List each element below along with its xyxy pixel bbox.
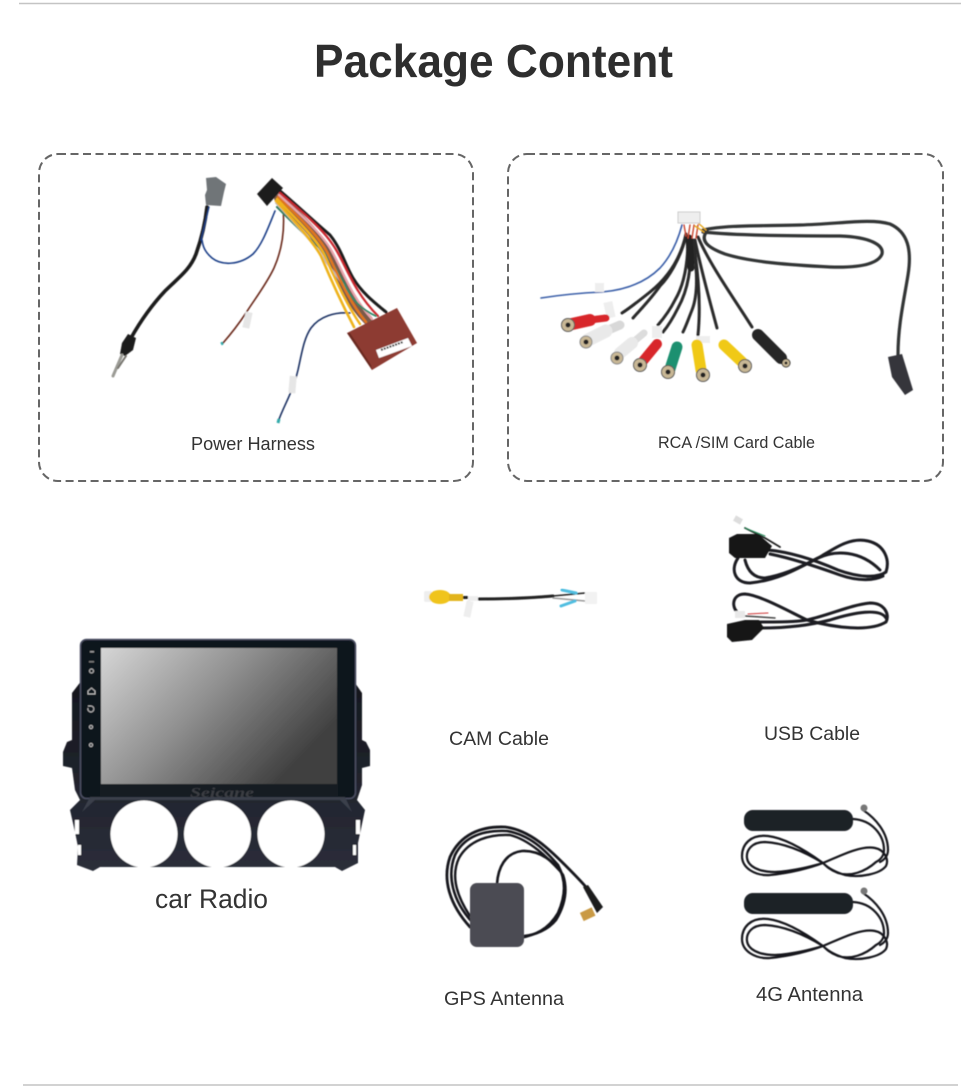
title: Package Content xyxy=(314,35,673,87)
icon: GPS antenna xyxy=(447,827,603,947)
label: USB cable: USB Cable xyxy=(764,723,860,745)
product: GPS antenna xyxy=(444,827,603,1010)
label: CAM cable: CAM Cable xyxy=(449,728,549,750)
icon: CAM cable xyxy=(424,590,597,618)
label: power harness: Power Harness xyxy=(191,434,315,454)
product: CAM cable xyxy=(424,590,597,750)
product: 4G antenna xyxy=(742,804,888,1006)
icon: USB cable xyxy=(727,515,887,642)
label: car radio: car Radio xyxy=(155,884,268,914)
label: GPS antenna: GPS Antenna xyxy=(444,988,564,1010)
panel: RCA SIM card cable xyxy=(508,154,943,481)
label: 4G antenna: 4G Antenna xyxy=(756,984,864,1006)
icon: power harness xyxy=(113,177,417,423)
icon: 4G antenna 1 xyxy=(742,804,888,876)
product: USB cable xyxy=(727,515,887,745)
panel: power harness xyxy=(39,154,473,481)
label: RCA SIM cable: RCA /SIM Card Cable xyxy=(658,434,815,452)
icon: car radio unit: Seicane xyxy=(190,786,254,801)
icon: 4G antenna 2 xyxy=(742,888,888,959)
icon: car radio unit xyxy=(63,640,370,871)
product: car radio xyxy=(63,640,370,914)
icon: RCA SIM cable xyxy=(541,212,913,395)
